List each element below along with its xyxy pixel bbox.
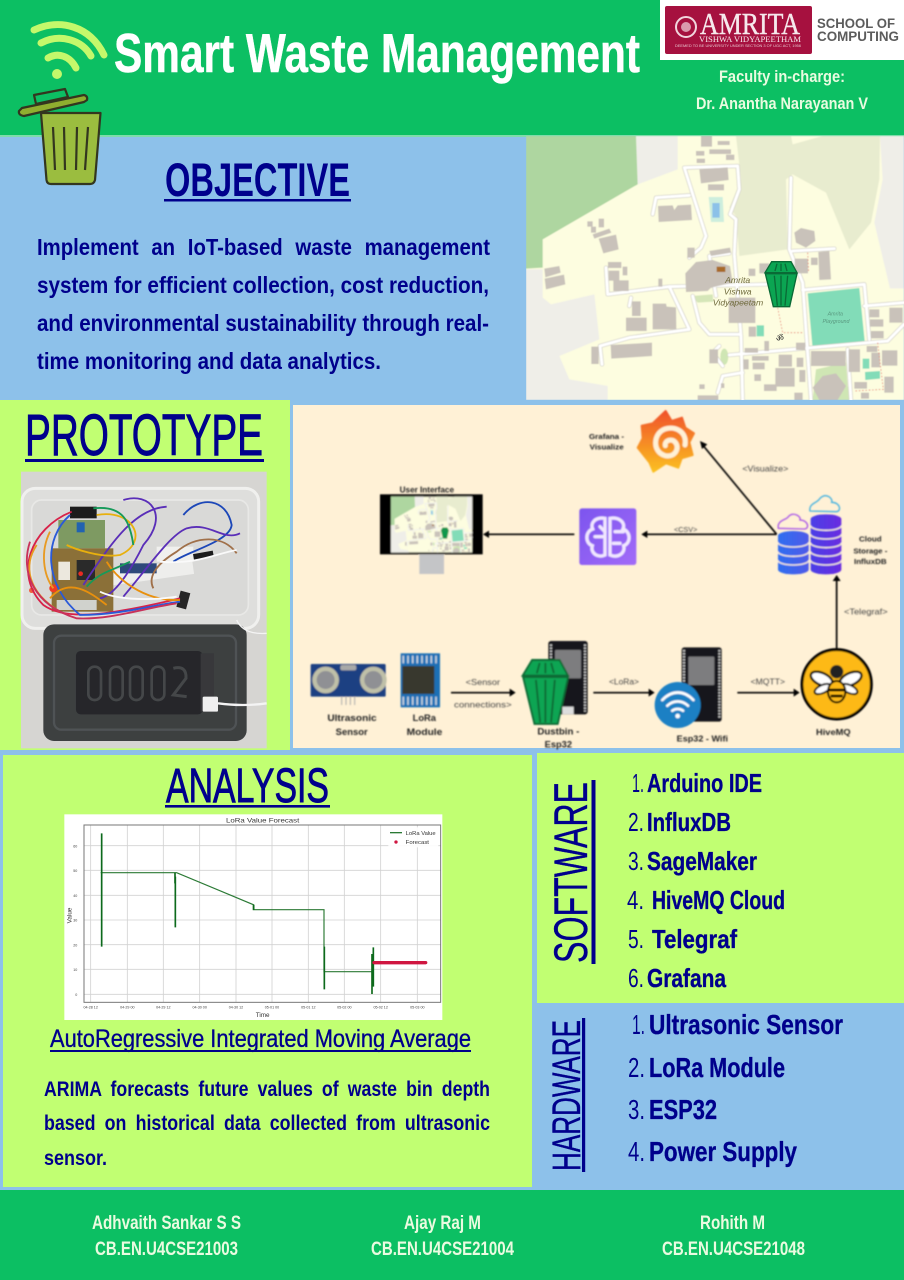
line chart: LoRa value forecast: 04-29 00 (120, 1006, 135, 1010)
logo: school of computing (817, 16, 899, 44)
hardware list: 3. (628, 1094, 645, 1125)
software list (627, 768, 785, 993)
line chart: LoRa value forecast: LoRa Value (406, 831, 436, 837)
analysis heading: ANALYSIS (166, 760, 329, 813)
line chart: LoRa value forecast: 20 (73, 943, 77, 947)
objective text (37, 234, 490, 374)
logo: Amrita: DEEMED TO BE UNIVERSITY UNDER SECTION 3 OF UGC ACT, 1956 (675, 43, 802, 48)
icon: cloud storage: InfluxDB (854, 557, 887, 566)
sensor labels: <Sensor (466, 677, 500, 687)
student: Ajay (371, 1213, 514, 1260)
icon: HiveMQ: HiveMQ (816, 727, 851, 737)
line chart: LoRa value forecast (64, 814, 442, 1020)
software list: Arduino IDE (647, 768, 762, 798)
objective text: time monitoring and data analytics. (37, 348, 381, 374)
icon: cloud storage (778, 496, 888, 574)
prototype heading (25, 403, 264, 468)
line chart: LoRa value forecast: 05-02 00 (337, 1006, 352, 1010)
arrow: AI model to UI (483, 531, 574, 538)
arrow: LoRa (593, 689, 655, 697)
hardware list: Power Supply (649, 1136, 797, 1167)
student: Ajay: Ajay Raj M (404, 1213, 481, 1234)
line chart: LoRa value forecast: LoRa Value Forecast (226, 817, 299, 824)
software heading (544, 780, 597, 964)
line chart: LoRa value forecast: Value (67, 907, 74, 923)
connection labels: <LoRa> (609, 677, 639, 686)
line chart: LoRa value forecast: 60 (73, 844, 77, 848)
arrow: to Grafana (700, 441, 777, 534)
prototype heading: PROTOTYPE (25, 403, 263, 468)
student: Adhvaith: Adhvaith Sankar S S (92, 1213, 241, 1234)
icon: AI model brain (579, 508, 636, 565)
line chart: LoRa value forecast: 04-30 12 (229, 1006, 243, 1010)
icon: ultrasonic sensor (311, 664, 387, 705)
icon: cloud storage: Cloud (859, 535, 882, 544)
sensor labels: Esp32 (545, 740, 572, 750)
map label: Playground (823, 319, 851, 325)
ARIMA description (44, 1078, 490, 1170)
map label: Amrita (827, 311, 843, 317)
line chart: LoRa value forecast: 05-03 00 (410, 1006, 425, 1010)
header band (0, 0, 904, 137)
student: Rohith: Rohith M (700, 1213, 765, 1234)
student: Rohith (662, 1213, 805, 1260)
faculty in-charge: Faculty in-charge: (719, 67, 845, 86)
map label (713, 275, 851, 325)
panel: hardware (537, 1006, 904, 1187)
line chart: LoRa value forecast: 05-02 12 (373, 1006, 388, 1010)
sensor labels: Ultrasonic (327, 713, 377, 723)
map of campus (526, 136, 904, 400)
icon: ESP32 wifi: Esp32 - Wifi (677, 734, 728, 744)
ARIMA subheading: AutoRegressive Integrated Moving Average (50, 1025, 471, 1053)
hardware heading (545, 1018, 589, 1172)
icon: bin marker (765, 262, 797, 307)
icon: HiveMQ (802, 650, 871, 737)
software list: 1. (632, 768, 644, 798)
line chart: LoRa value forecast: Time (256, 1012, 270, 1019)
sensor labels: connections> (454, 699, 512, 709)
icon: ESP32 with dustbin (523, 641, 588, 724)
icon: LoRa module (401, 653, 440, 707)
logo: school of computing: COMPUTING (817, 29, 899, 44)
Grafana label left part: Grafana - (589, 432, 625, 441)
objective text: system for efficient collection, cost reduction, (37, 272, 489, 298)
software list: Telegraf (652, 924, 737, 954)
Grafana label left part (589, 432, 625, 452)
software list: 5. (628, 924, 644, 954)
sensor labels: Sensor (336, 727, 368, 737)
connection labels: <CSV> (674, 525, 697, 534)
software list: Grafana (647, 963, 726, 993)
objective heading: OBJECTIVE (165, 153, 350, 206)
hardware list (628, 1009, 843, 1167)
logo block (660, 0, 904, 60)
Grafana label left part: Visualize (590, 443, 624, 452)
line chart: LoRa value forecast: 04-28 12 (83, 1006, 98, 1010)
faculty in-charge: Dr. Anantha Narayanan V (696, 94, 869, 113)
line chart: LoRa value forecast: 04-30 00 (192, 1006, 207, 1010)
logo: Amrita: AMRITA (700, 6, 801, 41)
map label: Amrita (724, 275, 750, 285)
logo: school of computing: SCHOOL OF (817, 16, 895, 31)
logo: Amrita (665, 6, 812, 54)
connection labels (609, 464, 888, 686)
arrow: telegraf to cloud (833, 575, 841, 648)
line chart: LoRa value forecast: 05-01 12 (301, 1006, 316, 1010)
hardware list: LoRa Module (649, 1052, 785, 1083)
student: Rohith: CB.EN.U4CSE21048 (662, 1239, 805, 1260)
student: Ajay: CB.EN.U4CSE21004 (371, 1239, 514, 1260)
ARIMA description: based on historical data collected from ultrasonic (44, 1112, 490, 1135)
objective text: and environmental sustainability through real- (37, 310, 489, 336)
panel: objective (1, 137, 526, 400)
line chart: LoRa value forecast: 05-01 00 (265, 1006, 279, 1010)
left half (311, 432, 636, 750)
sensor labels: LoRa (413, 713, 437, 723)
icon: wifi signal and trash bin (19, 25, 104, 184)
title: Smart Waste Management (114, 22, 640, 84)
panel: software (537, 753, 904, 1003)
icon: monitor user interface (380, 485, 483, 574)
student: Adhvaith (92, 1213, 241, 1260)
software heading: SOFTWARE (544, 782, 597, 963)
line chart: LoRa value forecast: 50 (73, 869, 77, 873)
sensor labels: Dustbin - (537, 726, 579, 736)
line chart: LoRa value forecast: 10 (73, 968, 77, 972)
arrow: MQTT (737, 689, 800, 697)
panel: prototype (0, 400, 290, 750)
software list: 4. (627, 885, 644, 915)
map label: Vishwa (724, 286, 752, 296)
connection labels: <Telegraf> (844, 606, 888, 616)
map label: Vidyapeetam (713, 298, 763, 308)
arrow: csv to model (641, 531, 777, 538)
right half (593, 411, 888, 744)
icon: ESP32 wifi (655, 647, 728, 744)
map of campus: ॐ (776, 333, 784, 343)
software list: 2. (628, 807, 644, 837)
line chart: LoRa value forecast: Forecast (406, 840, 429, 846)
software list: 3. (628, 846, 644, 876)
logo: Amrita: VISHWA VIDYAPEETHAM (699, 34, 801, 44)
ARIMA description: sensor. (44, 1147, 107, 1170)
connection labels: <MQTT> (751, 677, 785, 686)
icon: trash bin (19, 89, 100, 184)
hardware list: 2. (628, 1052, 645, 1083)
arrow: sensor connections (451, 689, 516, 697)
sensor labels (327, 677, 579, 750)
objective text: Implement an IoT-based waste management (37, 234, 490, 260)
faculty in-charge (696, 67, 869, 113)
hardware list: ESP32 (649, 1094, 717, 1125)
student: Adhvaith: CB.EN.U4CSE21003 (95, 1239, 238, 1260)
footer band (0, 1190, 904, 1280)
line chart: LoRa value forecast: 04-29 12 (156, 1006, 171, 1010)
icon: wifi signal (34, 25, 104, 79)
line chart: LoRa value forecast: 40 (73, 894, 77, 898)
icon: monitor user interface: User Interface (400, 485, 455, 494)
connection labels: <Visualize> (742, 464, 788, 474)
hardware list: Ultrasonic Sensor (649, 1009, 843, 1040)
panel: analysis (3, 755, 532, 1187)
icon: Grafana (638, 411, 694, 472)
hardware heading: HARDWARE (545, 1020, 589, 1171)
hardware list: 4. (628, 1136, 645, 1167)
hardware list: 1. (632, 1009, 645, 1040)
sensor labels: Module (407, 727, 442, 737)
software list: HiveMQ Cloud (652, 885, 785, 915)
software list: SageMaker (647, 846, 757, 876)
line chart: LoRa value forecast: 30 (73, 919, 77, 923)
ARIMA description: ARIMA forecasts future values of waste bin depth (44, 1078, 490, 1101)
software list: InfluxDB (647, 807, 731, 837)
software list: 6. (628, 963, 644, 993)
icon: cloud storage: Storage - (853, 546, 888, 555)
photo of prototype (21, 472, 267, 748)
line chart: LoRa value forecast: 0 (75, 993, 77, 997)
panel: system architecture diagram (293, 405, 900, 750)
